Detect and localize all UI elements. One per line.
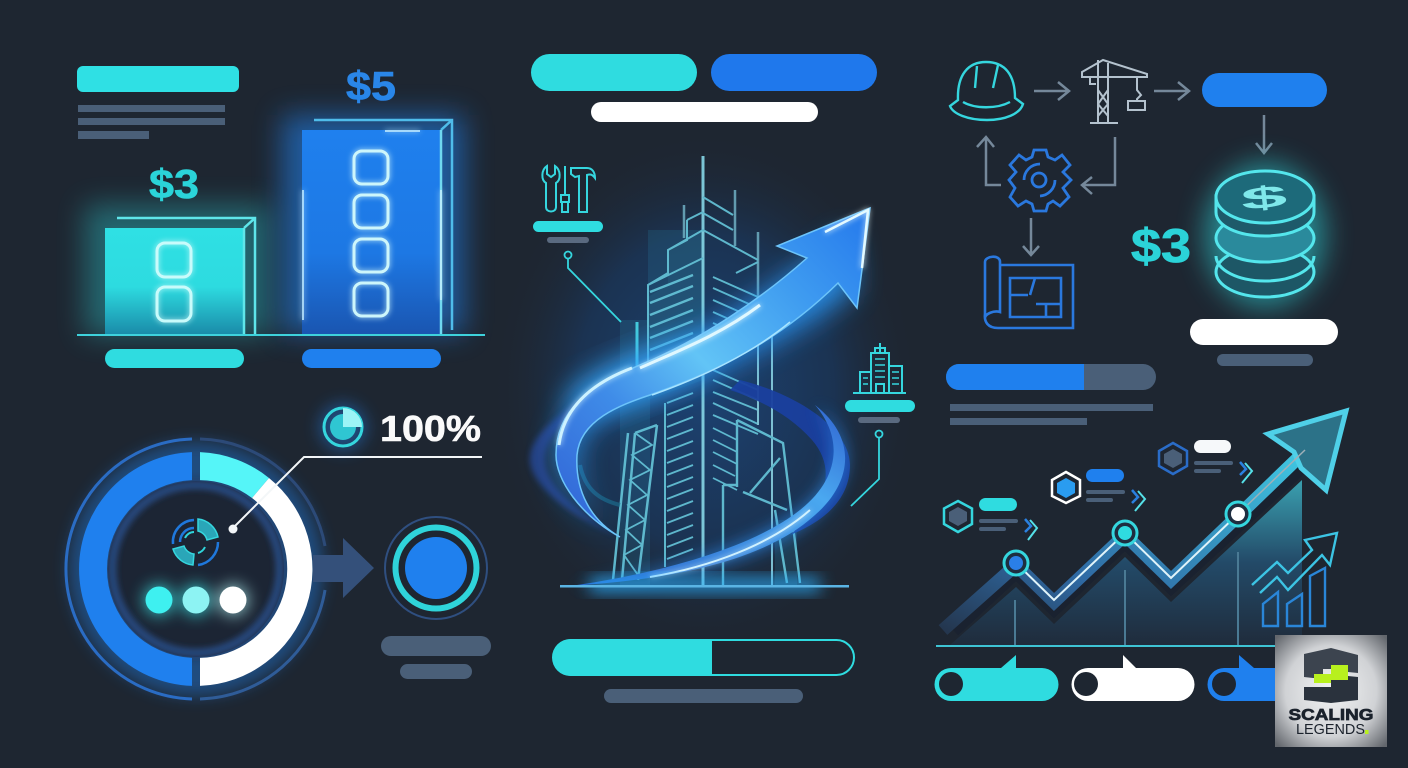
text placeholder lines — [78, 105, 225, 139]
gray label pill — [1217, 354, 1313, 366]
icon: tools — [542, 166, 595, 212]
icon: city — [853, 343, 906, 393]
label 100%: 100% — [380, 408, 481, 449]
outer thin ring left — [66, 439, 192, 699]
building line art — [613, 156, 800, 586]
subheader pill — [591, 102, 818, 122]
city sublabel — [858, 417, 900, 423]
arrow gear to plan — [1023, 218, 1039, 255]
left outer shade — [530, 390, 620, 537]
three dots — [144, 585, 248, 615]
tower fills — [648, 231, 703, 400]
panel: center growth — [490, 54, 920, 703]
cyan bar — [85, 205, 270, 335]
teal inner curve — [580, 465, 620, 505]
value label $5: $5 — [346, 63, 396, 109]
cyan segment — [200, 452, 269, 498]
baseline — [936, 645, 1281, 647]
translucent columns — [620, 230, 797, 585]
icon: crane — [1082, 60, 1147, 123]
trend band — [943, 459, 1297, 630]
ground line — [560, 578, 849, 592]
line shadow — [955, 470, 1302, 632]
tag blue — [1208, 655, 1300, 701]
tools connector — [564, 252, 621, 322]
coin stack — [1205, 163, 1325, 307]
city connector — [851, 430, 882, 506]
ribbon glow — [556, 230, 855, 537]
result text lines — [381, 636, 491, 679]
cyan label pill — [105, 349, 244, 368]
header pill cyan — [531, 54, 697, 91]
arrow crane to gear — [1082, 137, 1115, 194]
inner dark disc — [108, 481, 284, 657]
tools label — [533, 221, 603, 232]
panel: growth line chart — [934, 364, 1346, 701]
logo mark — [1304, 648, 1358, 703]
city label — [845, 400, 915, 412]
logo badge — [1275, 635, 1387, 747]
nodes — [1004, 502, 1250, 575]
panel: bar comparison — [77, 63, 485, 368]
arrow gear to hat — [977, 137, 1001, 185]
coin dollar sign: $ — [1239, 179, 1289, 217]
icon: radial gauge — [173, 519, 218, 565]
center glow — [490, 130, 920, 650]
logo accent dot — [1365, 730, 1368, 734]
progress caption — [604, 689, 803, 703]
result circle — [385, 517, 487, 619]
area under line — [950, 480, 1302, 645]
arrow crane to pill — [1154, 82, 1189, 100]
arrow inner line — [1238, 450, 1305, 514]
arrow pill to coins — [1256, 115, 1272, 153]
trend highlight — [1016, 514, 1238, 600]
chart arrowhead — [1268, 411, 1346, 490]
tools sublabel — [547, 237, 589, 243]
ribbon back sweep — [730, 380, 850, 535]
drop lines — [1015, 552, 1238, 645]
icon: blueprint — [985, 257, 1073, 328]
text placeholder lines — [950, 404, 1153, 425]
tag cyan — [934, 655, 1059, 701]
progress header — [946, 364, 1156, 390]
icon: gear — [1009, 150, 1071, 211]
arrow to result — [313, 538, 374, 598]
tag white — [1072, 655, 1195, 701]
blue bar — [282, 115, 464, 335]
header pill blue — [711, 54, 877, 91]
bottom swoosh — [570, 405, 845, 586]
central glow — [558, 325, 722, 425]
baseline — [77, 334, 485, 336]
white segment — [200, 478, 312, 686]
heading bar — [77, 66, 239, 92]
blue step pill — [1202, 73, 1327, 107]
value label $3: $3 — [149, 161, 199, 207]
white label pill — [1190, 319, 1338, 345]
icon: mini chart — [1252, 533, 1337, 626]
step 2 — [1052, 469, 1145, 511]
blue label pill — [302, 349, 441, 368]
callout dot — [228, 524, 238, 534]
icon: hard hat — [950, 62, 1023, 120]
icon: small pie — [319, 403, 367, 451]
arrow hat to crane — [1034, 82, 1069, 100]
outer thin ring right top — [200, 439, 325, 546]
callout line — [233, 457, 482, 528]
outer thin ring right bottom — [200, 590, 325, 699]
donut glow — [91, 464, 301, 674]
logo text: SCALING — [1288, 707, 1374, 724]
panel: donut chart — [66, 403, 491, 699]
blue segment — [79, 452, 192, 686]
inner ring glow — [112, 485, 280, 653]
progress bar — [552, 639, 854, 676]
logo subtext: LEGENDS — [1296, 722, 1365, 738]
step 1 — [944, 498, 1037, 540]
value label $3: $3 — [1131, 219, 1191, 272]
growth arrow — [556, 208, 870, 537]
panel: process flow — [950, 60, 1338, 366]
step 3 — [1159, 440, 1252, 483]
